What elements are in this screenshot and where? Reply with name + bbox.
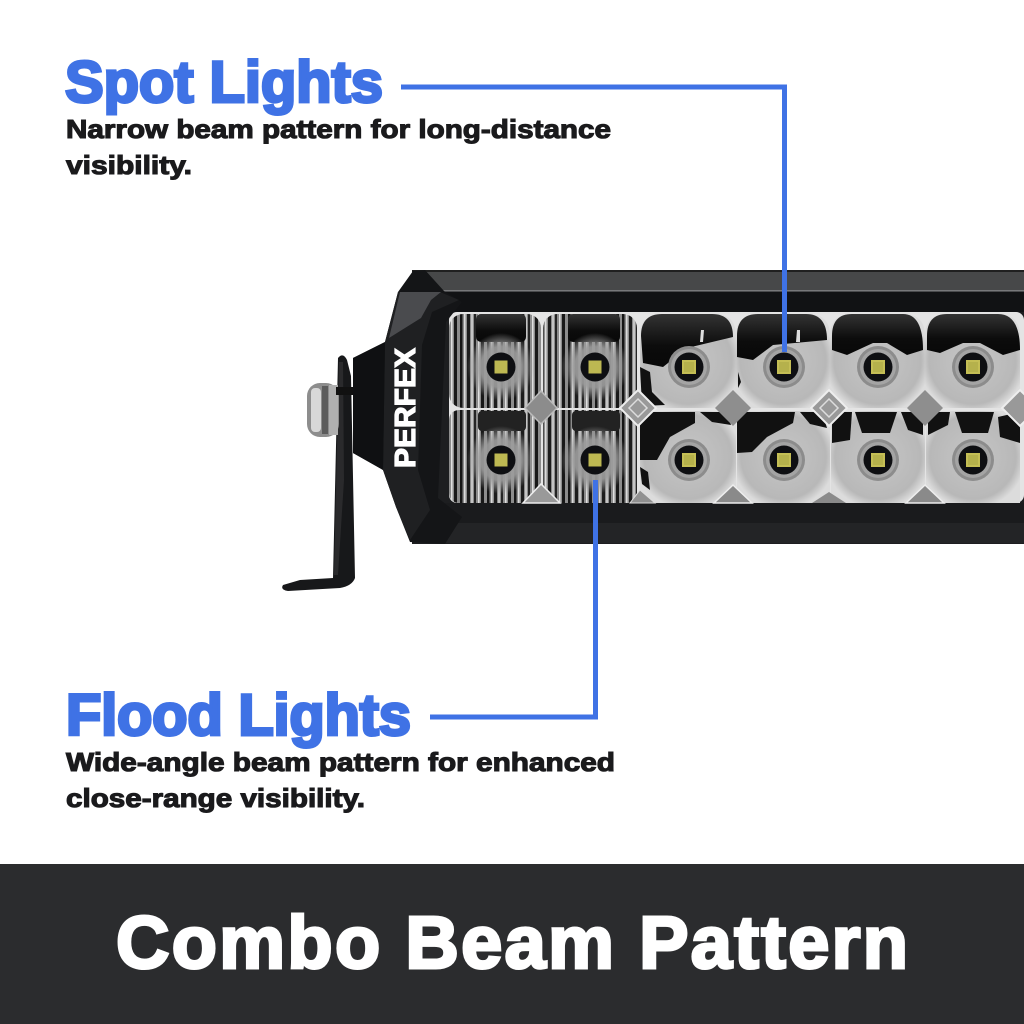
- end cap with logo: [353, 270, 462, 544]
- spot lights description: visibility.: [66, 150, 192, 180]
- flood modules: [449, 314, 637, 503]
- footer banner: [0, 864, 1024, 1024]
- flood lights description: [66, 747, 615, 813]
- spot lights description: [66, 114, 611, 180]
- spot lights heading: Spot Lights: [65, 50, 383, 115]
- flood lights description: close-range visibility.: [66, 783, 365, 813]
- lens panel: [449, 312, 1024, 503]
- logo text: PERFEX: [390, 347, 422, 468]
- spot modules bottom row: [640, 411, 1020, 503]
- spot lights description: Narrow beam pattern for long-distance: [66, 114, 611, 144]
- mounting bolt: [307, 383, 354, 437]
- LED light bar product image: [282, 270, 1024, 591]
- footer title: Combo Beam Pattern: [116, 901, 908, 984]
- flood lights heading: Flood Lights: [66, 683, 411, 748]
- flood lights description: Wide-angle beam pattern for enhanced: [66, 747, 615, 777]
- callout line: spot lights: [401, 87, 784, 352]
- spot modules top row: [640, 314, 1020, 408]
- bar housing: [412, 270, 1024, 544]
- mounting bracket: [282, 355, 355, 591]
- lens diamonds: [620, 390, 1024, 503]
- callout line: flood lights: [430, 480, 596, 717]
